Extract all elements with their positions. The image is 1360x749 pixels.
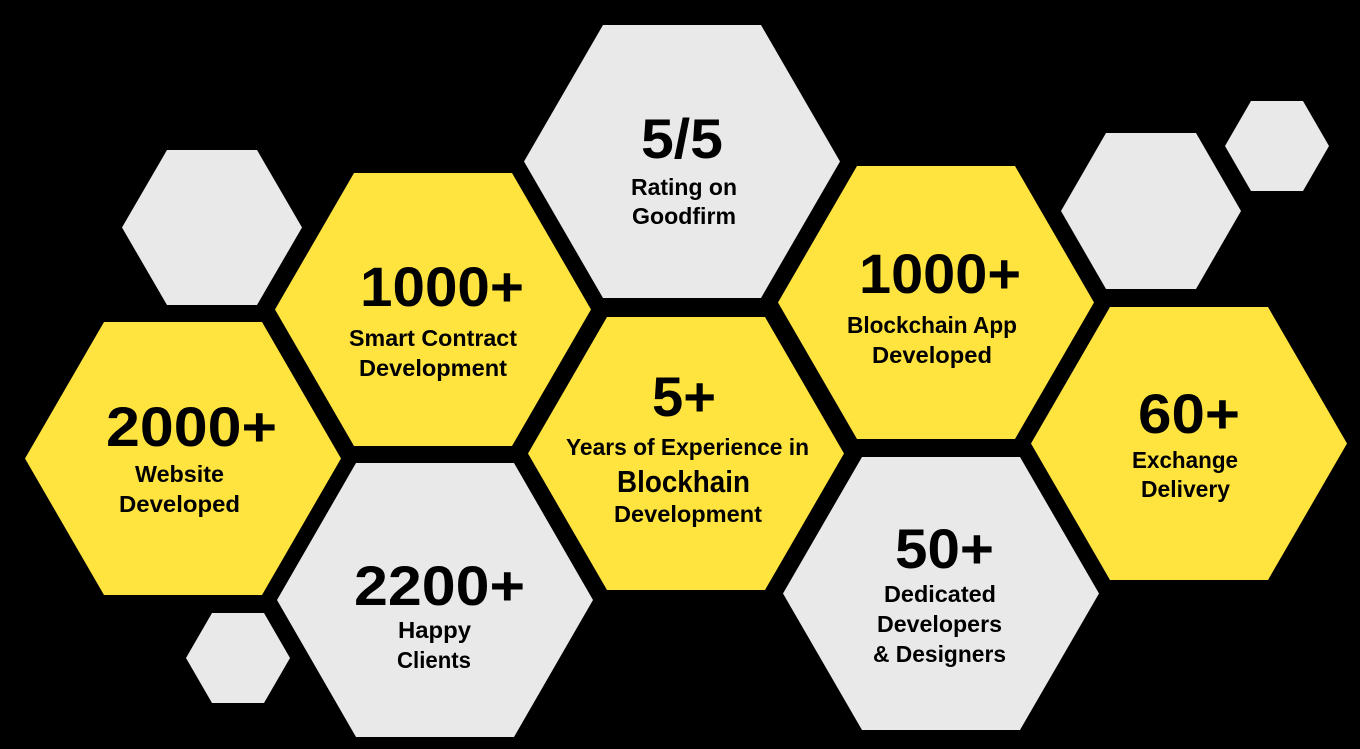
panel: 2000+ website developed: Website [135,461,224,487]
panel: 50+ dedicated developers and designers: & Designers [873,641,1006,667]
panel: 2200+ happy clients: 2200+ [354,554,525,617]
panel: 1000+ smart contract development: Development [359,355,507,381]
panel: 5/5 rating on Goodfirm: 5/5 [641,107,723,170]
panel: 60+ exchange delivery: 60+ [1138,382,1240,445]
panel: 1000+ blockchain app developed [778,166,1094,439]
panel: 2200+ happy clients: Happy [398,617,471,643]
panel: 2000+ website developed [25,322,341,595]
panel: 1000+ blockchain app developed: 1000+ [859,242,1021,305]
small hexagon: upper left [122,150,302,305]
panel: 50+ dedicated developers and designers: Dedicated [884,581,996,607]
panel: 60+ exchange delivery: Delivery [1141,476,1230,502]
panel: 5+ years of experience in blockhain development: Development [614,501,762,527]
panel: 2200+ happy clients: Clients [397,647,471,673]
panel: 1000+ smart contract development [275,173,591,446]
panel: 60+ exchange delivery: Exchange [1132,447,1238,473]
panel: 5/5 rating on Goodfirm [524,25,840,298]
panel: 2200+ happy clients [277,463,593,737]
panel: 2000+ website developed: 2000+ [106,395,277,458]
small hexagon: upper right [1061,133,1241,289]
panel: 1000+ smart contract development: 1000+ [360,255,524,318]
panel: 50+ dedicated developers and designers: Developers [877,611,1002,637]
panel: 1000+ blockchain app developed: Developed [872,342,992,368]
panel: 60+ exchange delivery [1031,307,1347,580]
panel: 5+ years of experience in blockhain development [528,317,844,590]
panel: 1000+ blockchain app developed: Blockchain App [847,312,1017,338]
panel: 50+ dedicated developers and designers [783,457,1099,730]
panel: 1000+ smart contract development: Smart Contract [349,325,517,351]
panel: 5+ years of experience in blockhain development: Blockhain [617,464,750,499]
small hexagon: top right corner [1225,101,1329,191]
panel: 5+ years of experience in blockhain development: Years of Experience in [566,434,809,460]
small hexagon: lower left [186,613,290,703]
panel: 5/5 rating on Goodfirm: Rating on [631,174,737,200]
panel: 5/5 rating on Goodfirm: Goodfirm [632,203,736,229]
panel: 50+ dedicated developers and designers: 50+ [895,517,994,580]
panel: 2000+ website developed: Developed [119,491,240,517]
panel: 5+ years of experience in blockhain development: 5+ [652,365,716,428]
